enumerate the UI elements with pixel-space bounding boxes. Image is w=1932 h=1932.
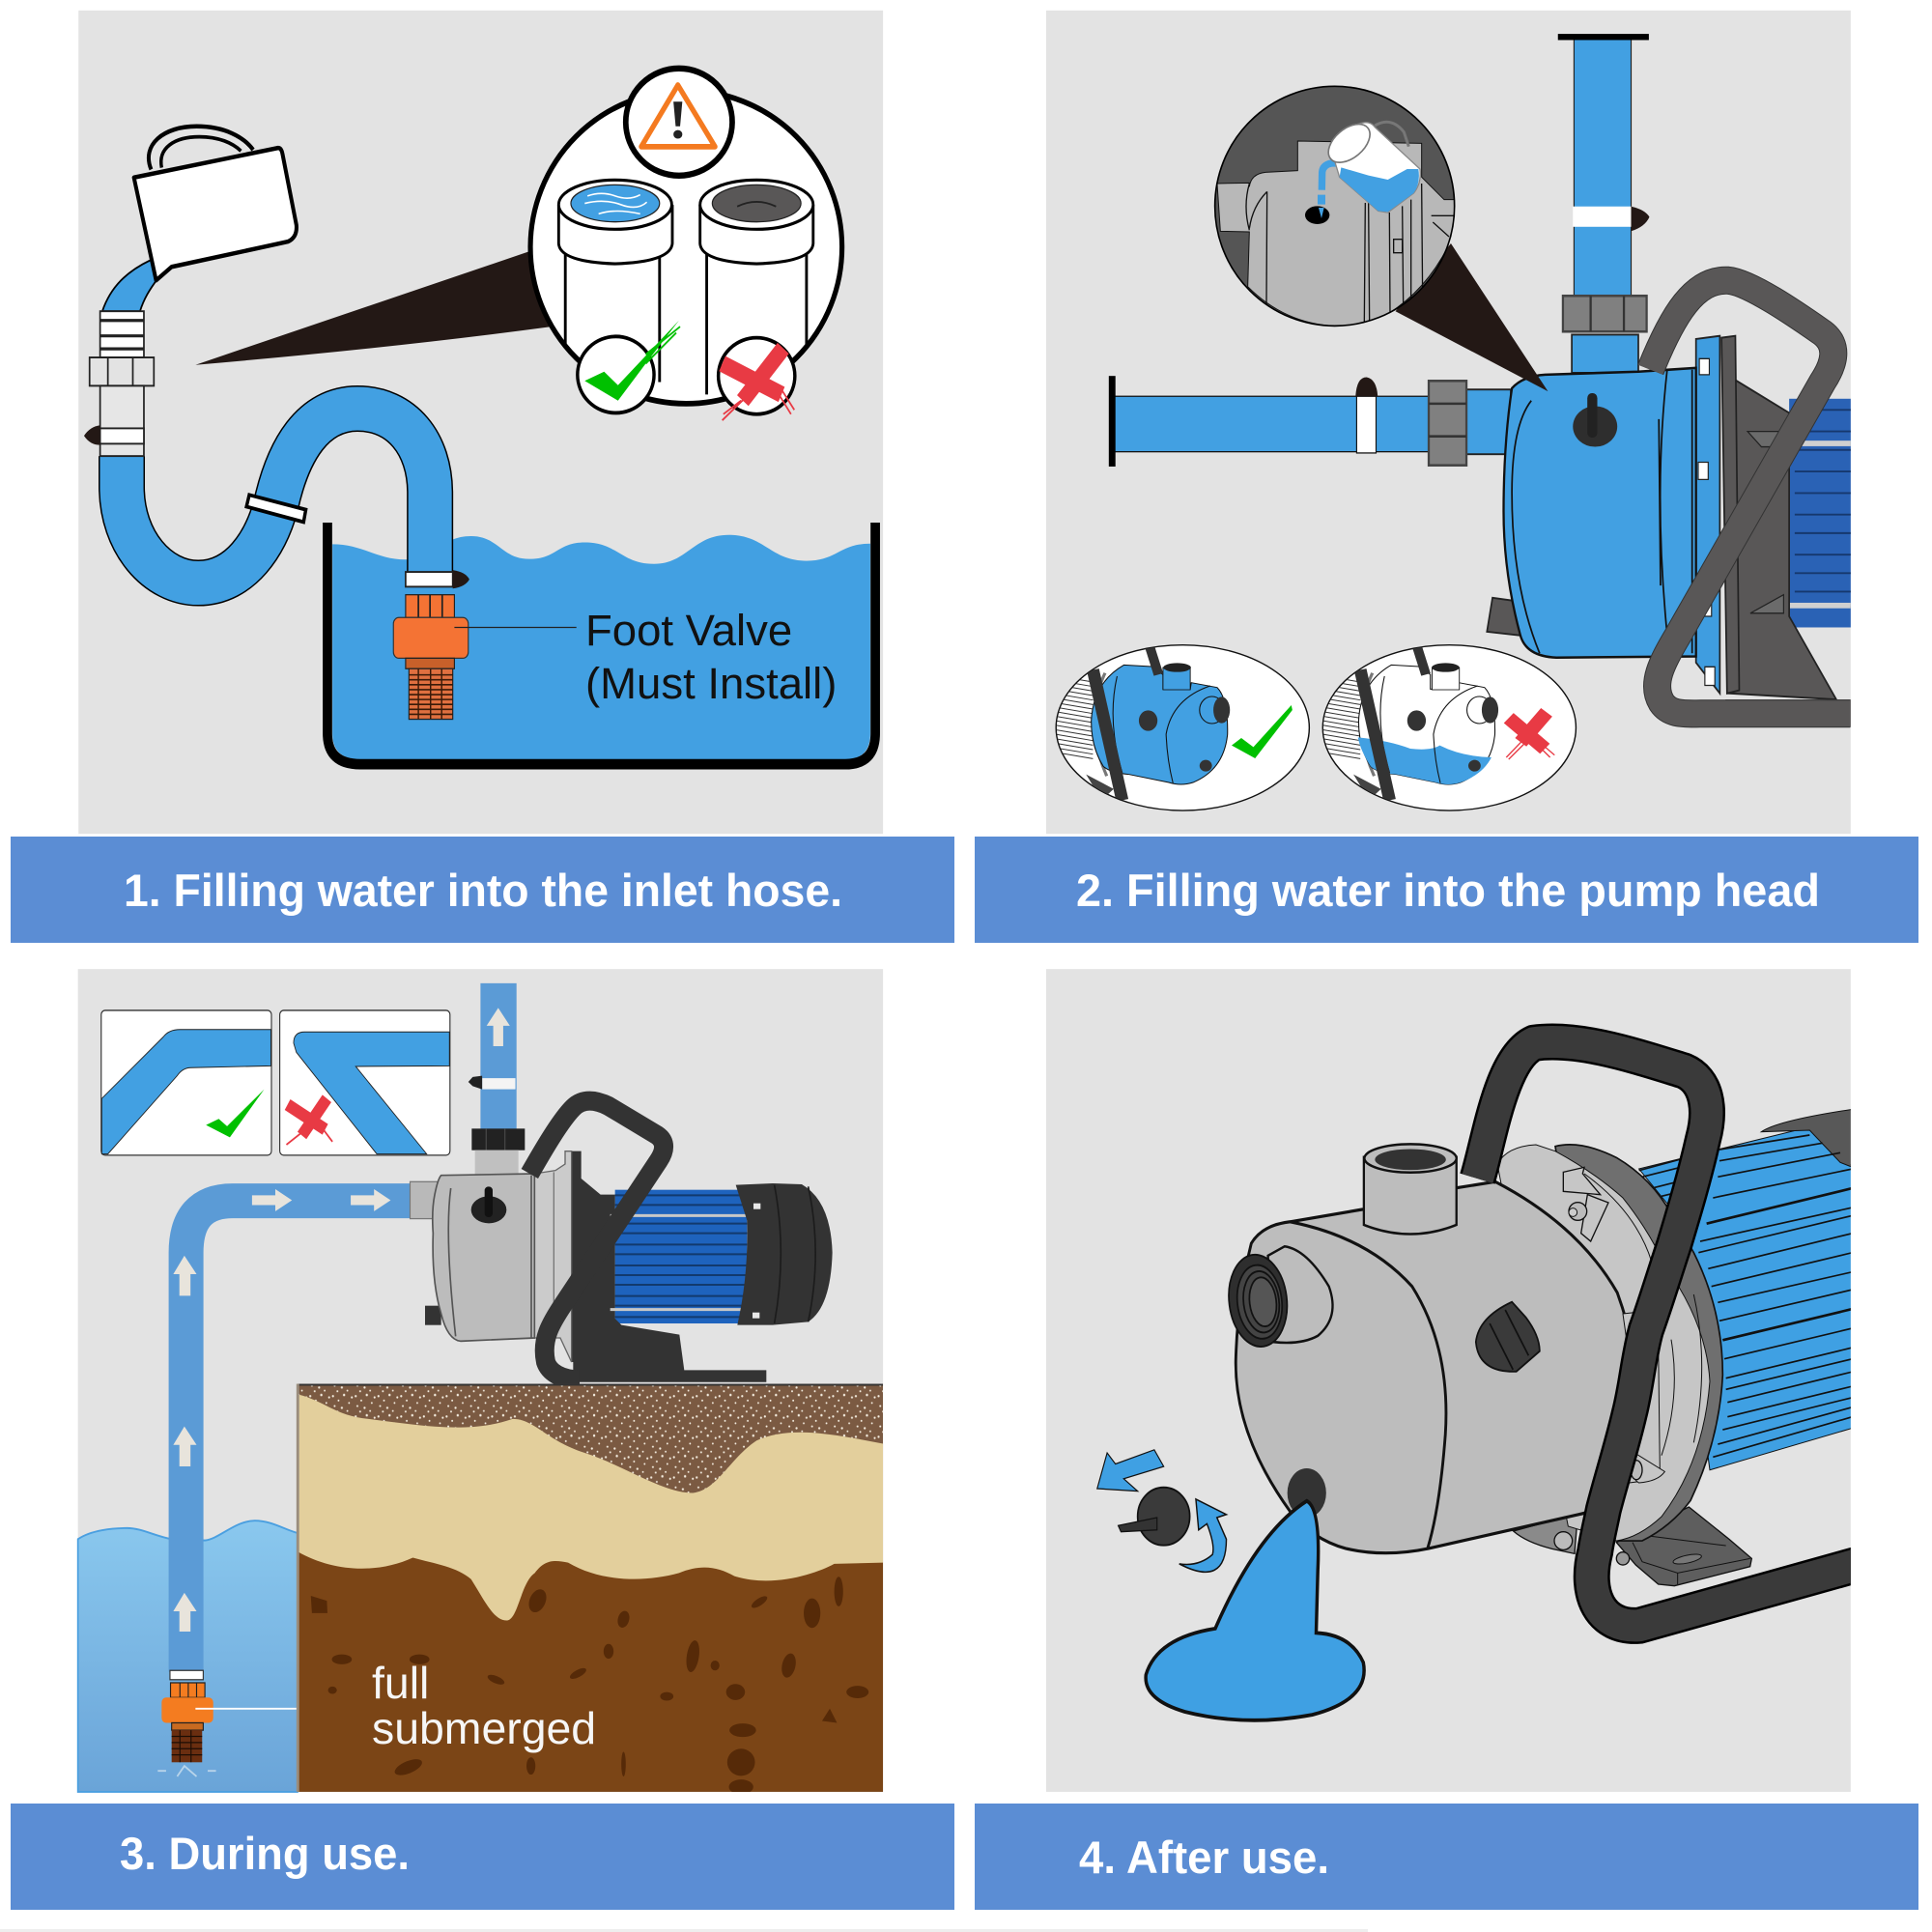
soil cross-section bbox=[297, 1384, 883, 1794]
removed drain plug bbox=[1119, 1488, 1190, 1546]
full submerged label: submerged bbox=[372, 1703, 596, 1753]
title bar 3 bbox=[11, 1804, 954, 1910]
title bar 1 bbox=[11, 837, 954, 943]
outlet pipe bbox=[469, 983, 517, 1131]
panel: step 3 during use bbox=[78, 969, 883, 1794]
title bar 4: 4. After use. bbox=[1079, 1832, 1329, 1883]
motor and bracket bbox=[1725, 379, 1851, 727]
metal rods bbox=[611, 1215, 751, 1310]
pump foot bbox=[425, 1306, 441, 1325]
inlet hose bbox=[102, 260, 430, 583]
callout lens: wet vs dry hose bbox=[530, 91, 842, 404]
full submerged label: full bbox=[372, 1658, 429, 1708]
water jug bbox=[134, 127, 297, 280]
callout wedge bbox=[1396, 243, 1548, 391]
title bar 1: 1. Filling water into the inlet hose. bbox=[124, 865, 842, 916]
good example: full pump bbox=[1055, 645, 1309, 810]
foot valve in water bbox=[157, 1670, 352, 1776]
top discharge port bbox=[1364, 1144, 1457, 1235]
front cap line bbox=[1291, 1222, 1446, 1548]
flange clamps and bolts bbox=[1563, 1167, 1664, 1483]
panel: step 1 filling the inlet hose bbox=[78, 11, 883, 834]
priming knob bbox=[1476, 1302, 1540, 1372]
arrow: pull out bbox=[1097, 1450, 1164, 1492]
pump body bbox=[1236, 1181, 1639, 1553]
foot valve label: Foot Valve bbox=[585, 606, 792, 655]
drain hole bbox=[1288, 1468, 1326, 1518]
suction hose with flow arrows bbox=[173, 1189, 412, 1672]
title bar 2: 2. Filling water into the pump head bbox=[1076, 865, 1820, 916]
foot valve bbox=[393, 570, 577, 720]
light inner ring bbox=[1497, 1145, 1710, 1541]
arrow: twist bbox=[1179, 1499, 1227, 1572]
steel flange bbox=[534, 1151, 572, 1362]
title bar 3: 3. During use. bbox=[120, 1828, 410, 1879]
foot valve label: (Must Install) bbox=[585, 659, 837, 708]
panel: step 2 filling the pump head bbox=[1046, 11, 1851, 834]
hose fitting and nut bbox=[84, 311, 154, 456]
inlet port stub bbox=[410, 1181, 438, 1219]
motor end cap bbox=[736, 1183, 833, 1325]
pump foot bbox=[1487, 598, 1525, 636]
title bar 4 bbox=[975, 1804, 1918, 1910]
motor flange ring bbox=[1555, 1145, 1722, 1541]
outlet nut and neck bbox=[471, 1128, 525, 1175]
motor fins bbox=[1639, 1109, 1853, 1470]
good bend inset bbox=[101, 1010, 271, 1155]
motor windings bbox=[615, 1190, 747, 1323]
horizontal inlet pipe bbox=[1109, 376, 1511, 467]
bad bend inset bbox=[280, 1010, 450, 1155]
title bar 2 bbox=[975, 837, 1918, 943]
steel pump body bbox=[433, 1174, 534, 1341]
motor bracket and base bbox=[572, 1151, 766, 1382]
lake water bbox=[78, 1520, 298, 1792]
pump with blue motor bbox=[425, 1101, 833, 1382]
frame handle bbox=[1478, 1041, 1856, 1626]
tub of water bbox=[327, 523, 875, 764]
mounting foot bbox=[1514, 1507, 1751, 1586]
check badge bbox=[578, 321, 680, 412]
callout lens: pouring water in priming hole bbox=[1215, 86, 1456, 326]
flange bbox=[1696, 336, 1739, 694]
cross badge bbox=[719, 338, 795, 420]
priming knob bbox=[1573, 393, 1617, 447]
frame handle bbox=[529, 1101, 664, 1379]
blue pump body bbox=[1504, 368, 1696, 658]
panel: step 4 after use bbox=[1046, 969, 1856, 1792]
motor, ring and mounting foot bbox=[1497, 1109, 1853, 1586]
callout wedge bbox=[195, 251, 552, 365]
water draining puddle bbox=[1146, 1501, 1364, 1720]
side inlet port bbox=[1224, 1246, 1333, 1350]
bad example: partly filled pump bbox=[1322, 645, 1576, 810]
frame handle bbox=[1651, 280, 1850, 714]
warning icon bbox=[626, 69, 732, 176]
vertical outlet pipe bbox=[1558, 34, 1649, 373]
knob bbox=[471, 1186, 506, 1223]
